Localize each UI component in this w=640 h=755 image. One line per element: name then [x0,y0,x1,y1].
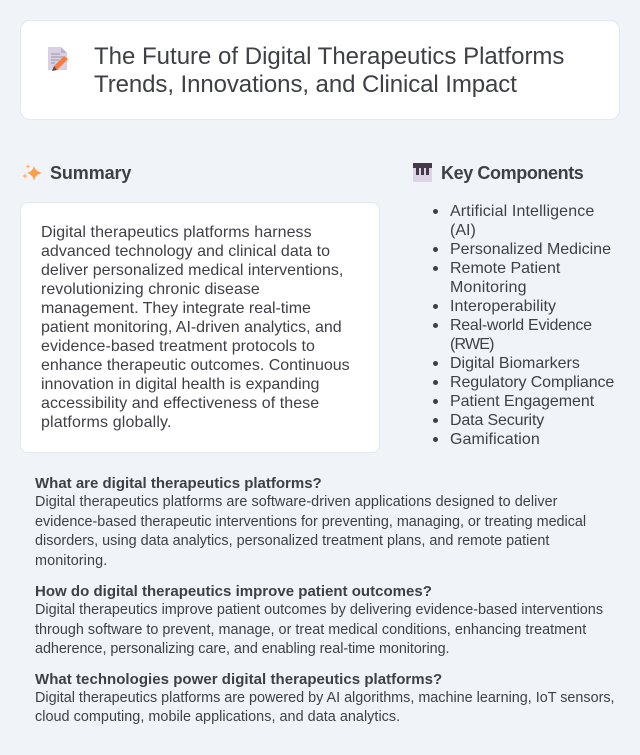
summary text: platforms globally. [41,414,172,431]
header card [20,20,620,120]
list: key components: Monitoring [450,279,527,296]
answer: Digital therapeutics improve patient outcomes by delivering evidence-based interventions [35,602,603,618]
list: key components: Data Security [450,412,544,429]
title [94,43,564,98]
list: key components: Patient Engagement [450,393,594,410]
heading: summary: Summary [50,163,131,183]
summary text: revolutionizing chronic disease [41,281,260,298]
list: key components: (RWE) [450,336,494,353]
title: The Future of Digital Therapeutics Platforms [94,43,564,70]
summary text: deliver personalized medical interventions, [41,262,343,279]
summary text: Digital therapeutics platforms harness [41,224,312,241]
list: key components: Interoperability [450,298,556,315]
list: key components: Remote Patient [450,260,560,277]
summary text: innovation in digital health is expanding [41,376,319,393]
list: key components: Real-world Evidence [450,317,592,334]
summary text [41,224,350,431]
panel: summary [20,202,380,453]
heading: key components: Key Components [441,163,583,183]
summary text: advanced technology and clinical data to [41,243,330,260]
icon: document with pencil [48,47,68,71]
question: How do digital therapeutics improve patient outcomes? [35,583,432,600]
answer: adherence, personalizing care, and enabling real-time monitoring. [35,641,449,657]
icon: piano keys [413,163,432,182]
icon: sparkles [22,164,42,181]
summary text: management. They integrate real-time [41,300,311,317]
answer: through software to prevent, manage, or treat medical conditions, enhancing treatment [35,622,586,638]
list: key components: Personalized Medicine [450,241,611,258]
answer: monitoring. [35,553,107,569]
summary text: enhance therapeutic outcomes. Continuous [41,357,350,374]
list: key components: Gamification [450,431,540,448]
question: What are digital therapeutics platforms? [35,475,322,492]
summary text: evidence-based treatment protocols to [41,338,315,355]
summary text: patient monitoring, AI-driven analytics, and [41,319,342,336]
answer: Digital therapeutics platforms are software-driven applications designed to deliver [35,494,558,510]
list: key components: Regulatory Compliance [450,374,614,391]
faq 1 [35,475,586,569]
answer [35,602,603,657]
list: key components: Digital Biomarkers [450,355,580,372]
answer: Digital therapeutics platforms are powered by AI algorithms, machine learning, IoT sensors, [35,690,615,706]
answer: disorders, using data analytics, personalized treatment plans, and remote patient [35,533,549,549]
answer [35,690,615,725]
list: key components [433,203,614,448]
faq 2 [35,583,603,657]
answer: evidence-based therapeutic interventions for preventing, managing, or treating medical [35,514,586,530]
question: What technologies power digital therapeutics platforms? [35,671,442,688]
answer: cloud computing, mobile applications, and data analytics. [35,709,400,725]
list: key components: (AI) [450,222,476,239]
answer [35,494,586,569]
list: key components: Artificial Intelligence [450,203,594,220]
title: Trends, Innovations, and Clinical Impact [94,71,517,98]
faq 3 [35,671,615,725]
summary text: accessibility and effectiveness of these [41,395,319,412]
